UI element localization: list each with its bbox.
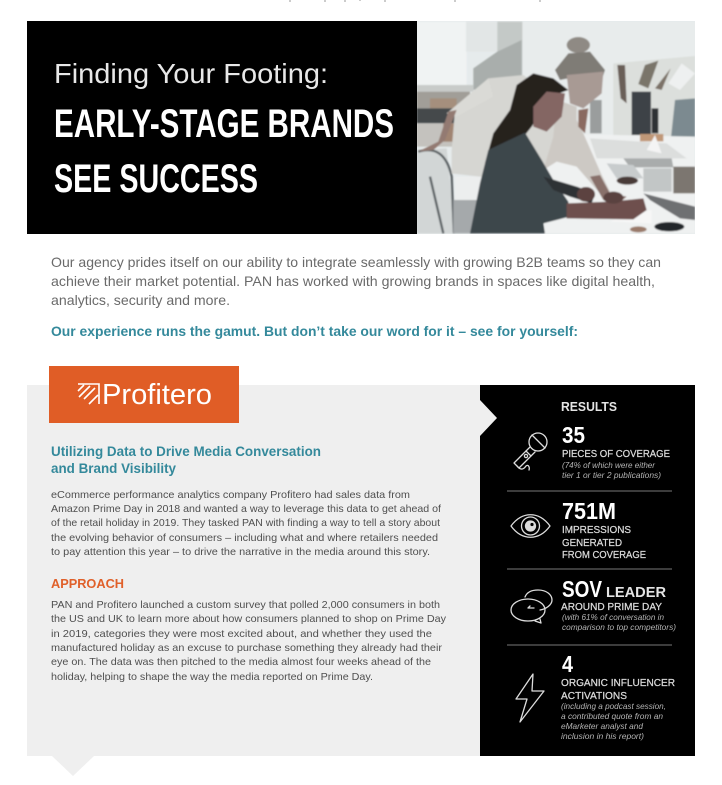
stat text: (74% of which were either (562, 460, 656, 470)
stat text: comparison to top competitors) (562, 622, 676, 632)
teal call-to-action line: Our experience runs the gamut. But don’t take our word for it – see for yourself: (51, 323, 578, 339)
approach paragraph: manufactured holiday as an excuse to purchase something they already had their (51, 642, 443, 654)
background paragraph: Amazon Prime Day in 2018 and wanted a way to leverage this data to get ahead of (51, 503, 441, 515)
result: coverage (514, 422, 670, 480)
stat text: IMPRESSIONS (562, 524, 631, 536)
stat text: LEADER (606, 584, 666, 601)
approach heading: APPROACH (51, 576, 124, 591)
subheading: and Brand Visibility (51, 461, 176, 476)
stat text: PIECES OF COVERAGE (562, 448, 670, 460)
title line: Early-Stage Brands: EARLY-STAGE BRANDS (54, 102, 394, 146)
stat text (562, 498, 646, 561)
subheading: Utilizing Data to Drive Media Conversation (51, 444, 321, 459)
stat text: SOV (562, 576, 603, 602)
logo mark (78, 384, 99, 404)
stat text: 35 (562, 422, 585, 448)
stat text: GENERATED (562, 537, 622, 549)
result: share of voice (511, 576, 676, 632)
icon: speech bubbles (511, 590, 552, 623)
photo: two women working at a desk (417, 21, 695, 234)
icon: lightning bolt (516, 674, 544, 722)
stat text: FROM COVERAGE (562, 549, 646, 561)
approach paragraph: eye on. The data was then pitched to the media almost four weeks ahead of the (51, 656, 431, 668)
intro paragraph: Our agency prides itself on our ability to integrate seamlessly with growing B2B teams so they can (51, 254, 661, 270)
icon: microphone (514, 433, 547, 470)
stat text: (with 61% of conversation in (562, 612, 664, 622)
stat text (561, 651, 675, 741)
intro paragraph: analytics, security and more. (51, 292, 230, 308)
stat text (562, 422, 670, 480)
background paragraph: of the retail holiday in 2019. They tasked PAN with finding a way to tell a story about (51, 517, 440, 529)
approach paragraph: PAN and Profitero launched a custom survey that polled 2,000 consumers in both (51, 599, 440, 611)
approach paragraph: in 2019, categories they were most excited about, and whether they used the (51, 628, 432, 640)
hero title panel (27, 21, 417, 234)
results heading: RESULTS (561, 399, 617, 414)
stat text: ORGANIC INFLUENCER (561, 677, 675, 689)
stat text: (including a podcast session, (561, 701, 666, 711)
intro paragraph (51, 254, 661, 308)
background paragraph (51, 489, 441, 558)
approach paragraph: the US and UK to learn more about how consumers planned to shop on Prime Day (51, 613, 447, 625)
title line: Finding Your Footing: Finding Your Footing: (54, 58, 328, 89)
stat text: inclusion in his report) (561, 731, 644, 741)
Profitero logo (49, 366, 239, 423)
hero banner (27, 21, 695, 234)
stat text: 4 (562, 651, 573, 677)
notch triangle (480, 400, 497, 436)
stat text: AROUND PRIME DAY (561, 601, 662, 613)
subheading (51, 444, 321, 476)
logo wordmark: Profitero (102, 379, 212, 411)
result: influencer activations (516, 651, 675, 741)
stat text: eMarketer analyst and (561, 721, 643, 731)
stat text: ACTIVATIONS (561, 690, 627, 702)
panel: results (480, 385, 695, 756)
stat text (561, 576, 676, 632)
panel: case study (27, 385, 480, 776)
background paragraph: eCommerce performance analytics company Profitero had sales data from (51, 489, 410, 501)
stat text: a contributed quote from an (561, 711, 663, 721)
approach paragraph (51, 599, 447, 683)
pointer triangle below panel (52, 756, 94, 776)
approach paragraph: holiday, helping to shape the way the media reported on Prime Day. (51, 671, 373, 683)
background paragraph: the evolving behavior of consumers – including what and where retailers needed (51, 532, 438, 544)
background paragraph: to pay attention this year – to drive the narrative in the media around this story. (51, 546, 430, 558)
stat text: tier 1 or tier 2 publications) (562, 470, 661, 480)
intro paragraph: achieve their market potential. PAN has worked with growing brands in spaces like digital health, (51, 273, 655, 289)
result: impressions (511, 498, 646, 561)
title line: See Success: SEE SUCCESS (54, 157, 258, 201)
icon: eye (511, 515, 550, 537)
stat text: 751M (562, 498, 616, 524)
